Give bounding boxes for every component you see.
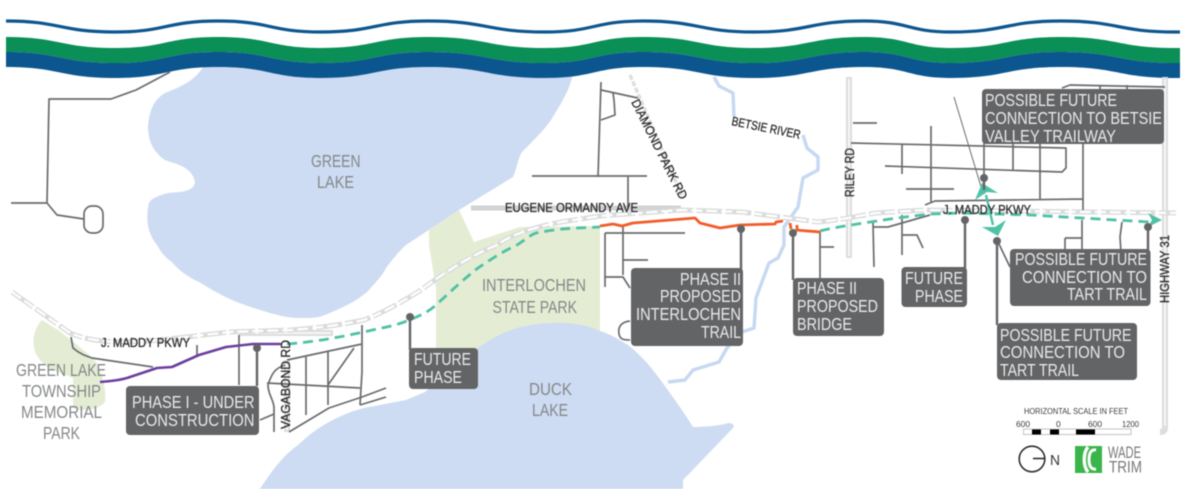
road label: J. Maddy Pkwy west: J. MADDY PKWY — [101, 336, 191, 350]
callout: Phase II proposed Interlochen Trail — [631, 268, 743, 346]
callout: possible connection to TART Trail, upper: CONNECTION TO — [1022, 267, 1147, 287]
callout: Future Phase west — [409, 348, 478, 389]
label: Duck Lake: LAKE — [532, 400, 568, 420]
label: Green Lake: GREEN — [311, 151, 360, 171]
lake: Green Lake — [147, 60, 574, 318]
callout: Future Phase east: PHASE — [915, 286, 963, 306]
place labels — [16, 151, 586, 443]
park: Interlochen State Park — [429, 210, 600, 352]
trail: Phase I purple under construction — [100, 344, 281, 382]
scale bar — [1016, 406, 1139, 434]
road label: Eugene Ormandy Ave: EUGENE ORMANDY AVE — [505, 201, 638, 215]
callout: possible connection to Betsie Valley Trailway — [982, 89, 1164, 146]
label: Duck Lake: DUCK — [529, 379, 572, 399]
local road network — [11, 72, 1165, 432]
river: Betsie River — [668, 77, 818, 382]
trail: Phase II orange proposed — [600, 218, 820, 232]
leader pins — [253, 174, 1152, 386]
callout: Phase II proposed bridge: PROPOSED — [797, 296, 878, 316]
label: Green Lake Township Memorial Park: TOWNSHIP — [22, 381, 101, 401]
wave band: green — [6, 37, 1180, 63]
scale bar: 600 — [1016, 419, 1030, 429]
logo: Wade Trim — [1075, 443, 1142, 476]
callout: Phase I under construction: PHASE I - UNDER — [132, 392, 254, 412]
label: Green Lake Township Memorial Park: PARK — [43, 423, 80, 443]
logo: Wade Trim: WADE — [1108, 443, 1141, 462]
road label: Vagabond Rd: VAGABOND RD — [279, 340, 293, 429]
trail: future phase dashed teal west — [287, 227, 600, 344]
callout: Phase I under construction: CONSTRUCTION — [135, 410, 254, 430]
callout: Phase II proposed bridge: PHASE II — [797, 278, 857, 298]
callout: possible connection to TART Trail, lower: POSSIBLE FUTURE — [1000, 325, 1132, 345]
logo: Wade Trim: TRIM — [1109, 458, 1142, 476]
trail: future phase dashed teal east — [820, 213, 1150, 231]
road label: Riley Rd: RILEY RD — [843, 148, 857, 197]
icon: north arrow — [1019, 446, 1060, 472]
label: Green Lake Township Memorial Park: MEMORIAL — [21, 402, 102, 422]
label: Interlochen State Park: INTERLOCHEN — [482, 275, 586, 295]
scale bar: 0 — [1056, 419, 1061, 429]
wave band: blue — [6, 52, 1180, 78]
callout: Future Phase west: PHASE — [414, 367, 462, 387]
callout: possible connection to TART Trail, upper: POSSIBLE FUTURE — [1015, 249, 1147, 269]
callout: Phase II proposed bridge — [793, 278, 884, 336]
river label: Betsie River: BETSIE RIVER — [730, 114, 802, 142]
lake: Duck Lake — [260, 323, 734, 489]
callout: Future Phase east — [902, 267, 967, 307]
label: Green Lake: LAKE — [317, 172, 354, 192]
icon: north arrow: N — [1050, 452, 1060, 469]
label: Green Lake Township Memorial Park: GREEN LAKE — [16, 360, 106, 380]
callout: possible connection to Betsie Valley Trailway: VALLEY TRAILWAY — [985, 126, 1116, 146]
callout: Future Phase west: FUTURE — [414, 349, 471, 369]
callout: possible connection to Betsie Valley Trailway: POSSIBLE FUTURE — [985, 90, 1117, 110]
arrow: connection to Betsie Valley Trailway — [975, 183, 998, 225]
callout: Phase II proposed Interlochen Trail: INTERLOCHEN — [636, 304, 741, 324]
secondary highways and light roads — [239, 75, 1165, 432]
arrow: connection to TART Trail — [982, 220, 1006, 236]
callout: Phase II proposed bridge: BRIDGE — [797, 314, 852, 334]
road label: J. Maddy Pkwy east: J. MADDY PKWY — [943, 203, 1032, 217]
road labels — [101, 97, 1172, 429]
scale bar: 1200 — [1122, 419, 1139, 429]
label: Interlochen State Park: STATE PARK — [492, 297, 577, 317]
callout: possible connection to TART Trail, lower — [997, 323, 1137, 380]
road: J. Maddy Parkway — [12, 210, 1176, 342]
callout: possible connection to TART Trail, lower: TART TRAIL — [1000, 360, 1079, 380]
callout: possible connection to TART Trail, lower: CONNECTION TO — [1000, 342, 1125, 362]
callout: Phase II proposed Interlochen Trail: PHASE II — [680, 269, 741, 289]
callout: possible connection to TART Trail, upper — [1010, 249, 1150, 306]
callout: Phase II proposed Interlochen Trail: TRAIL — [701, 322, 741, 342]
scale bar: HORIZONTAL SCALE IN FEET — [1024, 406, 1128, 416]
wave band: top line — [6, 21, 1180, 32]
scale bar: 600 — [1088, 419, 1102, 429]
road label: Diamond Park Rd: DIAMOND PARK RD — [628, 97, 690, 202]
arrow: east end of trail — [1148, 213, 1162, 227]
callout: Phase I under construction — [126, 386, 259, 435]
park: Green Lake Township Memorial Park — [34, 320, 105, 410]
callout: possible connection to TART Trail, upper: TART TRAIL — [1067, 284, 1147, 304]
callout: Phase II proposed Interlochen Trail: PROPOSED — [660, 286, 741, 306]
callout: Future Phase east: FUTURE — [905, 268, 963, 288]
road label: Highway 31: HIGHWAY 31 — [1158, 235, 1172, 303]
